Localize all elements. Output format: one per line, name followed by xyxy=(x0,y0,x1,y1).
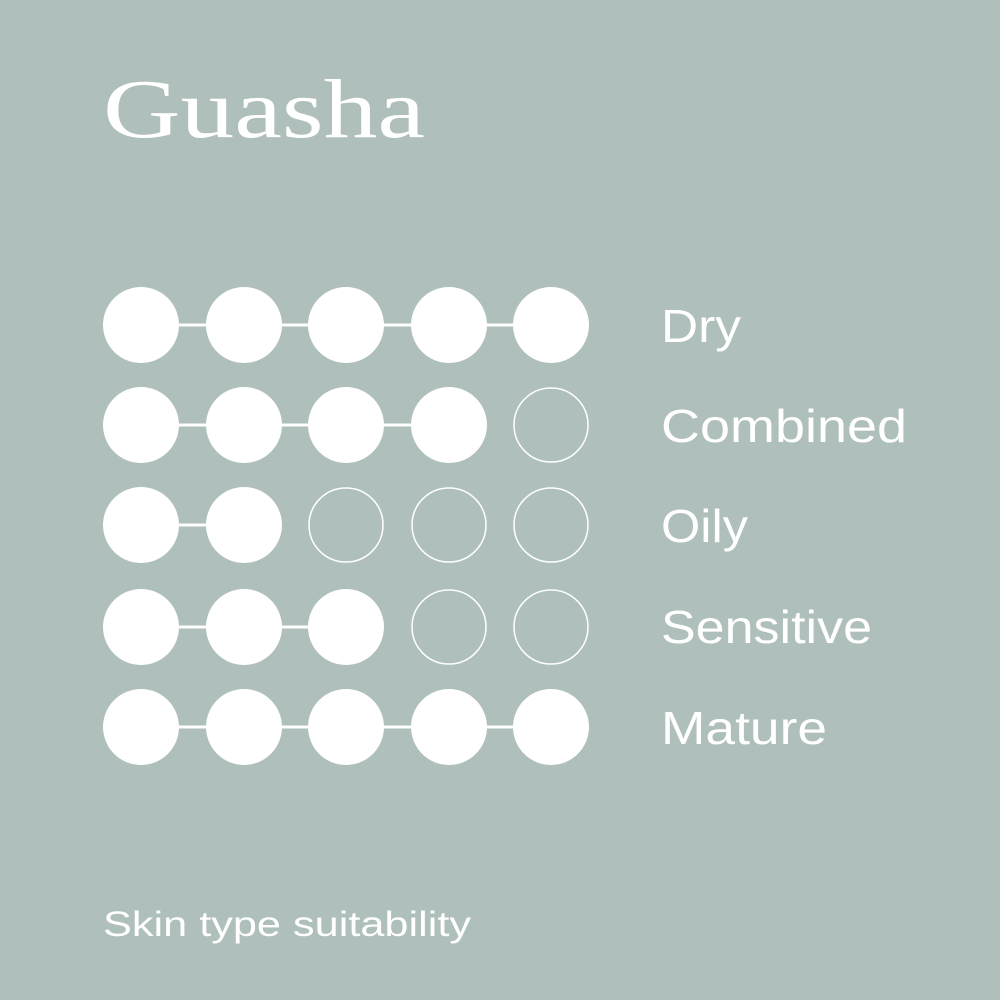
row: Sensitive xyxy=(103,589,588,665)
labels xyxy=(661,300,907,754)
title: Guasha xyxy=(103,63,425,156)
row: Oily xyxy=(103,487,588,563)
labels: Combined xyxy=(661,400,907,452)
row: Dry xyxy=(103,287,589,363)
labels: Oily xyxy=(661,500,748,552)
row: Combined xyxy=(103,387,588,463)
row: Mature xyxy=(103,689,589,765)
footer caption: Skin type suitability xyxy=(103,905,472,944)
labels: Dry xyxy=(661,300,741,352)
rating chart xyxy=(103,287,589,765)
labels: Mature xyxy=(661,702,827,754)
labels: Sensitive xyxy=(661,601,872,653)
